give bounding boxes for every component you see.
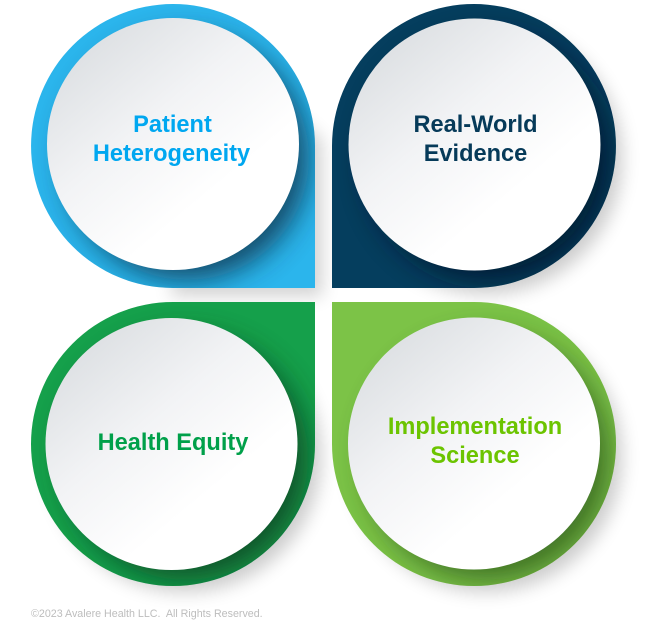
label: Health Equity: Health Equity	[98, 430, 248, 456]
label: Implementation Science: Implementation	[388, 414, 562, 440]
panel: Patient Heterogeneity	[31, 4, 322, 296]
label: Real-World Evidence: Evidence	[424, 141, 527, 167]
label: Real-World Evidence: Real-World	[413, 112, 538, 138]
label: Implementation Science: Science	[430, 443, 520, 469]
label: Patient Heterogeneity: Patient	[133, 112, 212, 138]
panel: Implementation Science	[332, 302, 622, 592]
copyright footer: ©2023 Avalere Health LLC. All Rights Reserved.	[31, 608, 263, 620]
label: Patient Heterogeneity: Heterogeneity	[93, 141, 250, 167]
panel: Real-World Evidence	[332, 4, 622, 294]
panel: Health Equity	[31, 302, 321, 592]
